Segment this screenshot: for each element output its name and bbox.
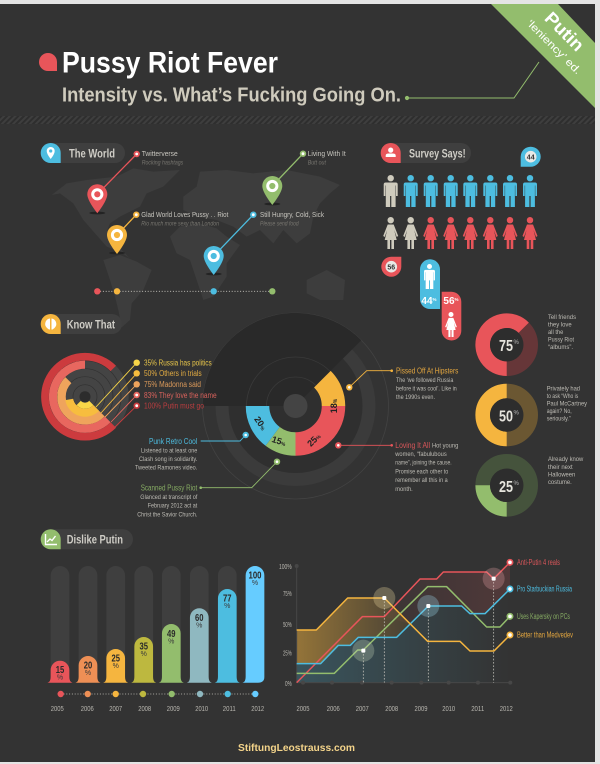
badge: 44 — [521, 147, 541, 167]
map pin: Living With It: Butt out — [308, 160, 326, 166]
bar 2010: % — [196, 622, 202, 630]
bar 2008: % — [141, 651, 147, 658]
section heading: The World — [41, 143, 125, 163]
bar 2006: % — [85, 670, 91, 677]
line chart x axis labels: 2009 — [414, 704, 428, 713]
line chart x axis labels: 2010 — [442, 704, 455, 713]
donut: 50 percent — [483, 391, 531, 439]
callout: Scanned Pussy Riot — [137, 458, 280, 518]
section heading: Dislike Putin: Dislike Putin — [67, 533, 123, 547]
callout: Loving It All: name”, joining the cause. — [395, 460, 452, 466]
badge: 56 — [381, 257, 401, 277]
pill: 56 percent women — [442, 292, 461, 341]
pill: 44 percent men: % — [433, 297, 437, 302]
donut: 50 percent: 50 — [499, 408, 513, 426]
note: Privately had: to ask “Who is — [547, 393, 578, 400]
radial chart legend: 50% Others in trials — [144, 369, 202, 378]
callout: Loving It All: month. — [395, 486, 413, 493]
donut: 50 percent: % — [514, 410, 520, 416]
bar 2010: 60 — [195, 613, 204, 624]
donut: 25 percent: 25 — [499, 479, 513, 496]
callout: Punk Retro Cool: Listened to at least one — [141, 448, 198, 454]
line chart y axis labels: 75% — [283, 589, 292, 598]
donut: 75 percent — [483, 321, 531, 369]
map pin: Living With It: Living With It — [308, 149, 346, 158]
map pin: Living With It — [262, 149, 346, 205]
note: Privately had: again? No, — [547, 408, 572, 415]
map pin: Twitterverse — [87, 149, 183, 214]
map pin: Twitterverse: Twitterverse — [142, 149, 178, 158]
section heading: Dislike Putin — [41, 529, 133, 549]
ribbon: Putin leniency ed.: ‘leniency’ ed. — [524, 18, 583, 77]
section heading: The World: The World — [69, 146, 115, 160]
line chart y axis labels — [279, 562, 292, 688]
bar 2005 — [48, 661, 72, 683]
bar 2007: % — [113, 663, 119, 670]
bar 2011 — [215, 589, 240, 683]
note: Already know: Halloween — [548, 472, 576, 478]
bar 2009: 49 — [167, 629, 176, 640]
map pin: Still Hungry: Still Hungry, Cold, Sick — [260, 210, 324, 219]
pill: 56 percent women: 56 — [443, 296, 455, 307]
bar 2008 — [131, 637, 156, 683]
map pin: Still Hungry — [204, 210, 324, 275]
world map — [52, 168, 345, 327]
line chart y axis labels: 0% — [285, 679, 292, 688]
women pictogram row — [383, 217, 538, 249]
map pin: Still Hungry: Please send food — [260, 220, 299, 228]
line chart plot — [295, 560, 513, 685]
radial chart legend: 83% They love the name — [144, 391, 217, 400]
subtitle: Intensity vs. What’s Fucking Going On. — [62, 84, 401, 106]
section heading: Know That: Know That — [67, 317, 115, 331]
bar 2007: 25 — [111, 654, 120, 664]
bar 2011: % — [224, 603, 230, 610]
title with red drop: Pussy Riot Fever — [62, 46, 278, 80]
callout: Punk Retro Cool: Tweeted Ramones video. — [135, 464, 197, 472]
bar 2006 — [76, 656, 100, 683]
note: Privately had: Paul McCartney — [547, 400, 588, 408]
line chart legend: Uses Kapersky on PCs — [517, 612, 570, 621]
connector from subtitle to ribbon — [405, 62, 539, 100]
callout: Punk Retro Cool: Punk Retro Cool — [149, 437, 197, 446]
bar 2011: 77 — [223, 594, 232, 604]
badge: 44: 44 — [527, 154, 535, 161]
callout: Punk Retro Cool: Clash song in solidarity. — [139, 456, 197, 463]
map pin: Glad World: Rio much more sexy than London — [141, 220, 219, 228]
bar chart years: 2007 — [109, 704, 122, 713]
bar 2005: 15 — [56, 665, 65, 676]
map timeline — [94, 288, 275, 294]
line chart x axis labels — [296, 704, 513, 713]
bar 2006: 20 — [84, 660, 93, 672]
bar chart: Dislike Putin — [48, 566, 264, 683]
bar 2012: % — [252, 580, 258, 587]
line chart y axis labels: 25% — [283, 648, 292, 658]
bar chart timeline — [58, 691, 258, 697]
note: Privately had — [547, 386, 588, 422]
men pictogram row — [384, 175, 537, 207]
callout: Loving It All: remember all this in a — [395, 477, 448, 484]
bar 2005: % — [57, 674, 63, 682]
bar tracks — [51, 566, 237, 683]
bar chart years: 2011 — [223, 704, 236, 713]
callout: Punk Retro Cool — [135, 432, 249, 472]
callout: Loving It All: Hot young — [432, 442, 459, 450]
map pin: Glad World: Glad World Loves Pussy . . Riot — [141, 210, 228, 219]
donut: 25 percent — [483, 461, 531, 509]
line chart legend: Better than Medvedev — [517, 631, 573, 640]
line chart legend: Anti-Putin 4 reals — [517, 558, 560, 567]
note: Already know: costume. — [548, 479, 572, 486]
bar 2009: % — [168, 638, 174, 646]
note: Already know: their next — [548, 464, 573, 471]
radial chart legend: 100% Putin must go — [144, 402, 204, 410]
note: Already know: Already know — [548, 456, 584, 463]
callout: Pissed Off At Hipsters — [346, 366, 458, 401]
callout: Pissed Off At Hipsters: Pissed Off At Hipsters — [396, 366, 458, 376]
radial chart legend — [96, 358, 217, 427]
callout: Scanned Pussy Riot: Glanced at transcript of — [140, 494, 197, 501]
callout: Loving It All — [335, 441, 459, 493]
radial progress chart — [41, 353, 129, 440]
ribbon: Putin leniency ed. — [491, 4, 595, 108]
line chart x axis labels: 2007 — [356, 704, 369, 713]
line chart y axis labels: 50% — [283, 620, 292, 629]
callout: Loving It All: Loving It All — [395, 441, 430, 450]
pill: 56 percent women: % — [455, 297, 459, 302]
bar chart years: 2008 — [138, 704, 151, 713]
bar 2008: 35 — [139, 642, 148, 652]
callout: Scanned Pussy Riot: Scanned Pussy Riot — [141, 484, 198, 492]
donut: 75 percent: % — [514, 340, 520, 346]
line chart — [279, 558, 573, 713]
bar 2012 — [242, 566, 264, 683]
pill: 44 percent men: 44 — [421, 296, 433, 307]
section heading: Survey Says: Survey Says! — [409, 146, 466, 160]
callout: Scanned Pussy Riot: February 2012 act at — [148, 502, 197, 510]
line chart x axis labels: 2012 — [500, 704, 513, 713]
bar chart years: 2006 — [81, 704, 94, 713]
callout: Pissed Off At Hipsters: The ‘we followed Russia — [396, 377, 454, 384]
ribbon: Putin leniency ed.: Putin — [541, 8, 588, 55]
line chart x axis labels: 2006 — [327, 704, 340, 713]
bar 2009 — [159, 624, 184, 683]
central donut chart: 20% — [252, 414, 269, 433]
bar chart years: 2012 — [251, 704, 264, 713]
note: Tell friends — [548, 314, 576, 351]
note: Tell friends: all the — [548, 329, 564, 336]
pill: 44 percent men — [420, 259, 440, 309]
radial chart legend: 35% Russia has politics — [144, 358, 212, 368]
map pin: Glad World — [107, 210, 228, 254]
radial chart legend: 75% Madonna said — [144, 380, 201, 389]
badge: 56: 56 — [387, 264, 395, 271]
bar 2012: 100 — [248, 570, 262, 582]
bar chart years: 2005 — [51, 704, 64, 713]
central donut chart: 18% — [329, 398, 339, 413]
central donut chart — [252, 379, 339, 449]
section heading: Survey Says — [381, 143, 471, 163]
bar chart years: 2010 — [195, 704, 208, 713]
line chart legend: Pro Starbuckian Russia — [517, 585, 572, 594]
note: Tell friends: they love — [548, 322, 572, 328]
section heading: Know That — [41, 314, 122, 334]
note: Tell friends: “albums”. — [548, 344, 573, 351]
donut: 25 percent: % — [514, 481, 520, 487]
line chart x axis labels: 2005 — [296, 704, 310, 713]
central radar backdrop — [202, 313, 388, 499]
bar 2010 — [187, 608, 212, 683]
bar chart years — [51, 704, 264, 713]
callout: Pissed Off At Hipsters: the 1990s even. — [396, 394, 435, 401]
note: Tell friends: Pussy Riot — [548, 336, 574, 344]
line chart y axis labels: 100% — [279, 562, 292, 571]
note: Privately had: Privately had — [547, 386, 580, 392]
callout: Loving It All: women, “fabulubous — [394, 451, 447, 458]
note: Tell friends: Tell friends — [548, 314, 576, 321]
donut: 75 percent: 75 — [499, 338, 513, 355]
bar 2007 — [103, 649, 128, 683]
callout: Scanned Pussy Riot: Christ the Savior Church. — [137, 512, 197, 518]
note: Already know — [548, 456, 584, 486]
footer credit: StiftungLeostrauss.com — [238, 742, 355, 754]
bar chart years: 2009 — [167, 704, 180, 713]
callout: Pissed Off At Hipsters: before it was cool’. Like in — [396, 386, 457, 392]
line chart legend — [517, 558, 573, 640]
callout: Loving It All: Promise each other to — [395, 468, 449, 476]
map pin: Twitterverse: Rocking hashtags — [142, 160, 183, 166]
note: Privately had: seriously.” — [547, 416, 571, 422]
line chart x axis labels: 2008 — [385, 704, 398, 713]
central donut chart: 25% — [305, 431, 323, 449]
line chart x axis labels: 2011 — [471, 704, 484, 713]
central donut chart: 15% — [271, 434, 288, 448]
